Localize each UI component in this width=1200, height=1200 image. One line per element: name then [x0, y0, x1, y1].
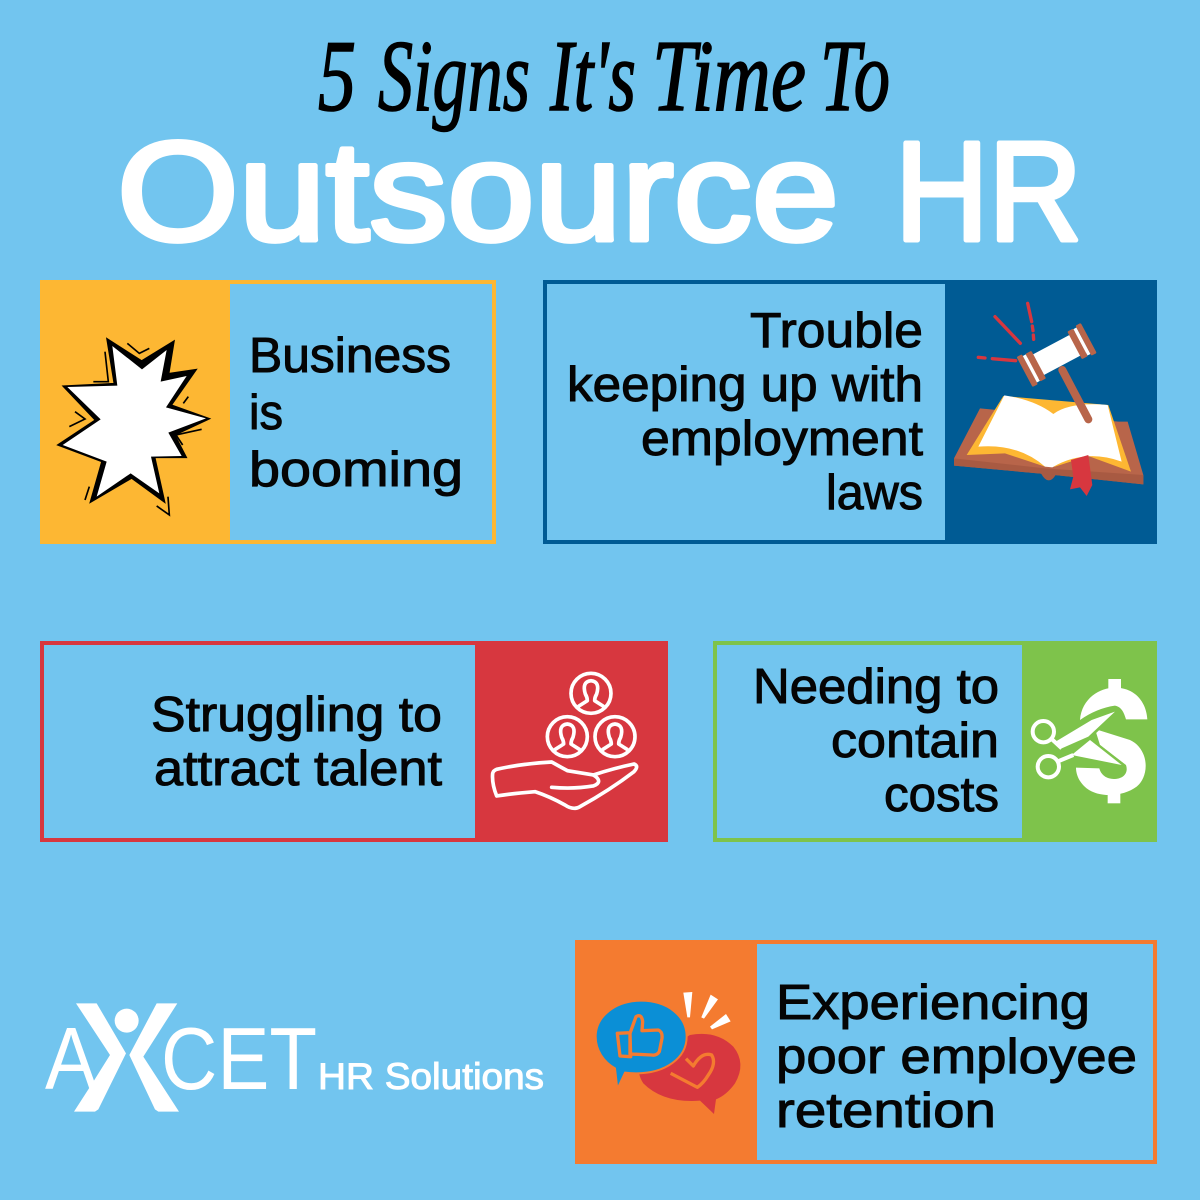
text: business is booming: is: [249, 386, 283, 440]
icon: comic starburst: [57, 338, 210, 515]
logo: Axcet HR Solutions: [45, 1003, 544, 1112]
text: needing to contain costs: Needing to: [753, 660, 999, 714]
icon: hand holding people: [492, 673, 637, 808]
text: needing to contain costs: [753, 660, 999, 822]
text: struggling to attract talent: attract talent: [154, 742, 442, 796]
text: trouble keeping up with employment laws: employment: [641, 412, 923, 466]
text: trouble keeping up with employment laws: Trouble: [750, 304, 923, 358]
logo: Axcet HR Solutions: A: [45, 1009, 97, 1108]
logo tagline: HR Solutions: HR Solutions: [318, 1056, 544, 1097]
text: trouble keeping up with employment laws: keeping up with: [567, 358, 923, 412]
text: experiencing poor employee retention: Experiencing: [776, 976, 1090, 1030]
panel: contain costs: [715, 641, 1157, 842]
title: 5 Signs It's Time To: Signs: [378, 20, 530, 133]
title: 5 Signs It's Time To: It's: [549, 20, 636, 133]
icon: gavel and open book: [954, 303, 1143, 496]
title: 5 Signs It's Time To: To: [820, 20, 890, 133]
text: needing to contain costs: contain: [831, 714, 999, 768]
text: experiencing poor employee retention: [776, 976, 1137, 1138]
text: business is booming: Business: [249, 329, 451, 383]
text: business is booming: booming: [249, 443, 463, 497]
title: Outsource HR: Outsource: [117, 112, 839, 270]
text: business is booming: [249, 329, 463, 497]
text: trouble keeping up with employment laws: laws: [826, 466, 923, 520]
title: Outsource HR: [117, 112, 1082, 270]
logo mark: stylised X with figure: [74, 1003, 179, 1112]
text: struggling to attract talent: Struggling to: [151, 688, 442, 742]
text: needing to contain costs: costs: [884, 768, 999, 822]
icon: scissors cutting dollar sign: [1033, 679, 1147, 803]
title: 5 Signs It's Time To: Time: [652, 20, 806, 133]
title: 5 Signs It's Time To: [318, 20, 890, 133]
panel: attract talent: [42, 641, 668, 842]
panel: employee retention: [575, 940, 1155, 1164]
icon: chat bubbles with thumb and heart: [596, 992, 740, 1114]
text: experiencing poor employee retention: retention: [776, 1084, 996, 1138]
title: Outsource HR: HR: [895, 112, 1082, 270]
panel: business is booming: [40, 280, 494, 544]
panel: employment laws: [545, 280, 1157, 544]
logo wordmark: CET: CET: [161, 1009, 317, 1108]
title: 5 Signs It's Time To: 5: [318, 20, 356, 133]
text: experiencing poor employee retention: poor employee: [776, 1030, 1137, 1084]
text: struggling to attract talent: [151, 688, 442, 796]
text: trouble keeping up with employment laws: [567, 304, 923, 520]
